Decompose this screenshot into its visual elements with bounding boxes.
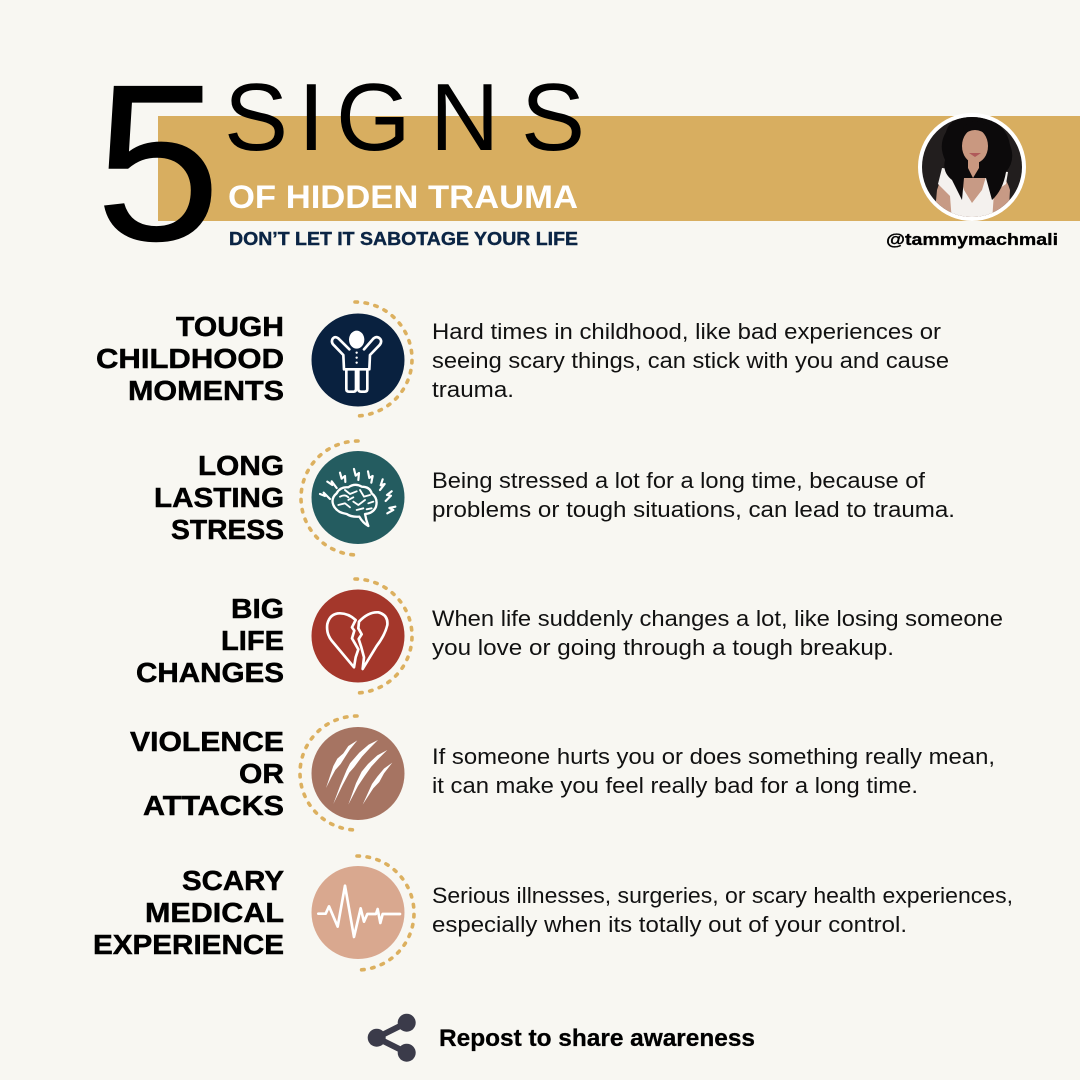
row 5 description: especially when its totally out of your control. <box>432 912 907 937</box>
icon: share <box>368 1014 416 1062</box>
row 1 dashed arc <box>355 302 412 416</box>
row 1 heading: TOUGH <box>176 311 284 342</box>
social handle: @tammymachmali <box>886 230 1058 249</box>
row 5 heading <box>93 865 284 960</box>
row 1 description: trauma. <box>432 377 514 402</box>
row 3 description <box>432 606 1003 660</box>
row 5 heading: MEDICAL <box>145 897 284 928</box>
row 3 dashed arc <box>355 579 412 693</box>
big numeral 5: 5 <box>95 38 221 288</box>
icon: child with raised arms <box>332 331 381 392</box>
row 5 dashed arc <box>357 856 414 970</box>
tagline: DON’T LET IT SABOTAGE YOUR LIFE <box>229 229 578 249</box>
row 2 heading <box>154 450 284 545</box>
row 4 heading: VIOLENCE <box>130 726 284 757</box>
title: SIGNS: SIGNS <box>224 64 585 171</box>
row 3 heading: CHANGES <box>136 657 284 688</box>
row 2 heading: LONG <box>198 450 284 481</box>
row 5 description: Serious illnesses, surgeries, or scary health experiences, <box>432 883 1013 908</box>
row 5 icon circle <box>312 866 404 959</box>
row 1 heading: CHILDHOOD <box>96 343 284 374</box>
subtitle: of hidden trauma: OF HIDDEN TRAUMA <box>228 179 578 215</box>
row 4 description <box>432 744 995 798</box>
icon: heartbeat line <box>318 886 400 937</box>
gold header band <box>158 116 1080 221</box>
row 4 description: If someone hurts you or does something really mean, <box>432 744 995 769</box>
row 5: scary medical experience <box>93 856 1013 970</box>
row 2 heading: LASTING <box>154 482 284 513</box>
row 2 description <box>432 468 955 522</box>
row 1 heading <box>96 311 284 406</box>
row 3 heading: BIG <box>231 593 284 624</box>
row 4 heading: ATTACKS <box>143 790 284 821</box>
icon: broken heart <box>327 612 387 669</box>
row 3 heading: LIFE <box>221 625 284 656</box>
icon: claw scratches <box>326 740 392 805</box>
row 4 icon circle <box>312 727 404 820</box>
row 1 description <box>432 319 949 402</box>
row 5 heading: SCARY <box>182 865 284 896</box>
row 3: big life changes <box>136 579 1003 693</box>
row 4 heading <box>130 726 284 821</box>
row 2 description: problems or tough situations, can lead to trauma. <box>432 497 955 522</box>
row 4 dashed arc <box>300 716 357 830</box>
row 4 description: it can make you feel really bad for a long time. <box>432 773 918 798</box>
row 2 description: Being stressed a lot for a long time, because of <box>432 468 926 493</box>
row 2 dashed arc <box>301 441 358 555</box>
icon: brain with lightning <box>320 469 395 526</box>
row 3 description: you love or going through a tough breakup. <box>432 635 894 660</box>
row 3 icon circle <box>312 590 404 682</box>
footer call to action: Repost to share awareness <box>439 1025 755 1052</box>
row 2 heading: STRESS <box>171 514 284 545</box>
row 1 heading: MOMENTS <box>128 375 284 406</box>
row 1 description: Hard times in childhood, like bad experiences or <box>432 319 941 344</box>
row 2: long lasting stress <box>154 441 955 555</box>
row 4: violence or attacks <box>130 716 995 830</box>
row 5 description <box>432 883 1013 937</box>
row 4 heading: OR <box>239 758 284 789</box>
row 3 heading <box>136 593 284 688</box>
profile photo <box>918 113 1026 222</box>
row 2 icon circle <box>312 451 404 544</box>
row 5 heading: EXPERIENCE <box>93 929 284 960</box>
row 1: tough childhood moments <box>96 302 949 416</box>
row 1 icon circle <box>312 314 404 406</box>
row 1 description: seeing scary things, can stick with you and cause <box>432 348 949 373</box>
row 3 description: When life suddenly changes a lot, like losing someone <box>432 606 1003 631</box>
